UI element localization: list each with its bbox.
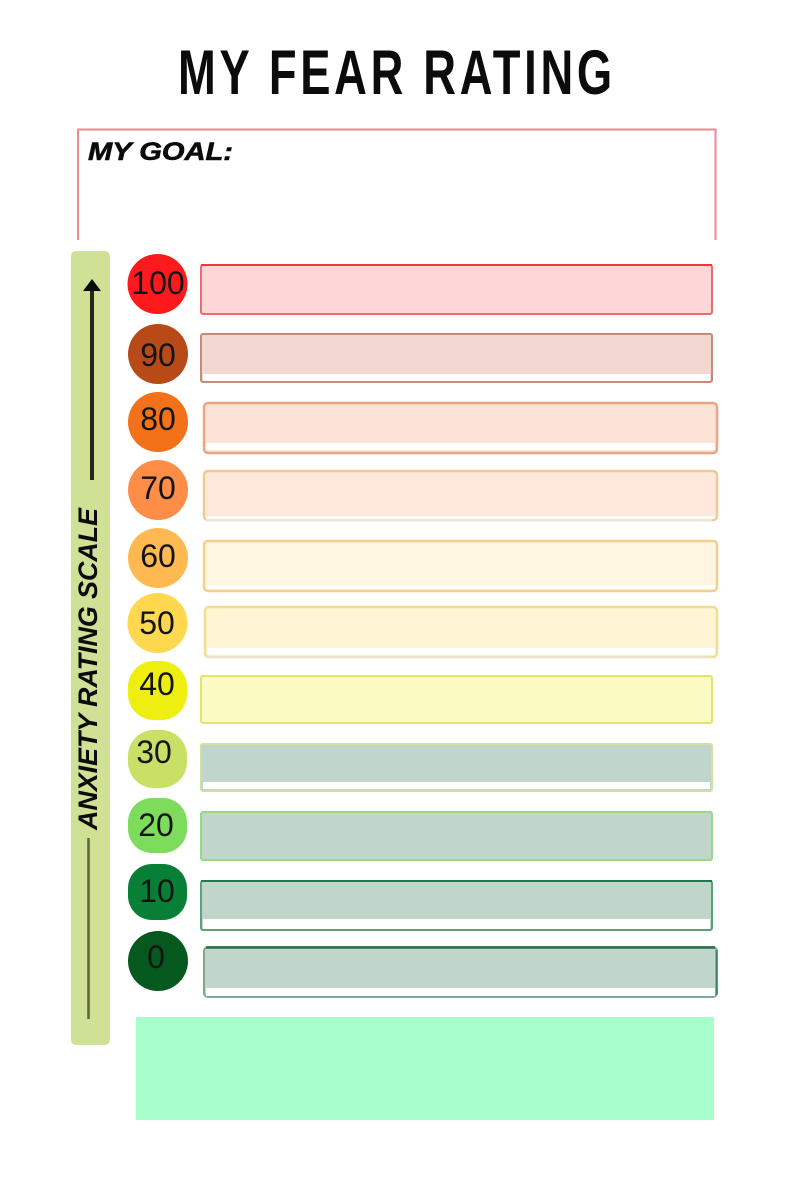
panel: anxiety rating scale (71, 251, 110, 1045)
rating 0: 0 (147, 939, 165, 975)
rating 90 (128, 324, 712, 384)
rating 20 (128, 798, 712, 860)
rating 20: 20 (138, 807, 174, 843)
rating 80 (128, 392, 717, 453)
rating 60 (128, 528, 717, 591)
scale label: ANXIETY RATING SCALE (73, 507, 103, 831)
rating 100 (128, 254, 712, 314)
rating 30: 30 (136, 734, 172, 770)
title: MY FEAR RATING (178, 37, 612, 108)
panel: mint notes box (136, 1017, 714, 1120)
rating 10 (128, 864, 712, 930)
rating 70: 70 (140, 470, 176, 506)
rating 40 (128, 661, 712, 723)
rating 50 (128, 593, 717, 657)
panel: my goal (78, 130, 716, 240)
rating 60: 60 (140, 538, 176, 574)
scale line (87, 838, 90, 1019)
goal label: MY GOAL: (88, 138, 233, 166)
rating 30 (128, 730, 712, 791)
rating 50: 50 (139, 605, 175, 641)
rating 0 (128, 931, 717, 997)
rating 10: 10 (139, 873, 175, 909)
arrow: up (83, 279, 101, 480)
rating 90: 90 (140, 337, 176, 373)
rating 100: 100 (131, 265, 185, 301)
rating 70 (128, 460, 717, 520)
rating 80: 80 (140, 401, 176, 437)
rating 40: 40 (139, 666, 175, 702)
